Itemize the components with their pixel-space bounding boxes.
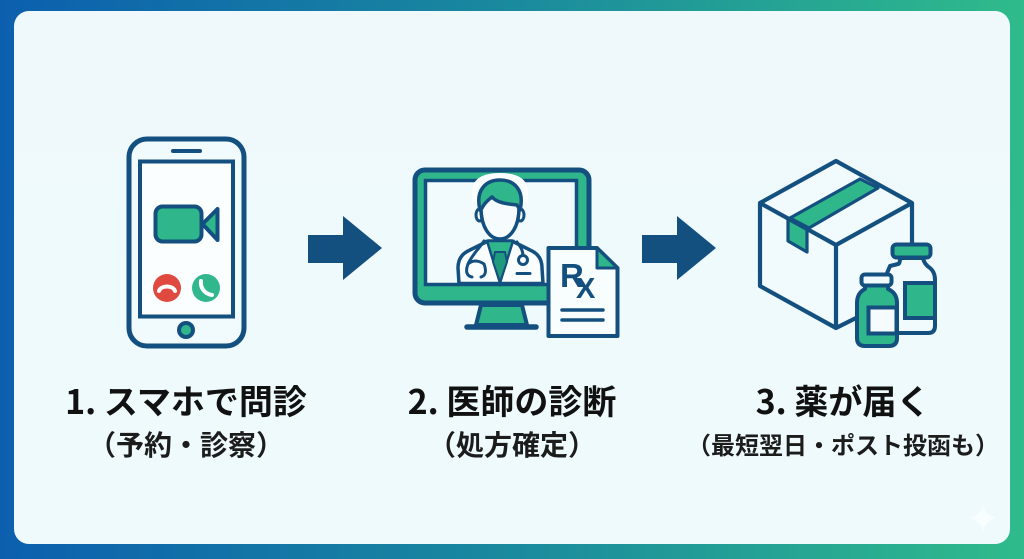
prescription document: R (560, 257, 584, 294)
prescription document (548, 248, 618, 336)
prescription document: X (576, 273, 596, 305)
heading: step 1: 1. スマホで問診 (65, 375, 307, 424)
text: step 2 note: （処方確定） (428, 424, 596, 464)
arrow: step 1 to 2 (308, 216, 382, 280)
text: step 1 note: （予約・診察） (88, 424, 284, 464)
heading: step 3: 3. 薬が届く (756, 375, 930, 424)
icon: sparkle watermark (969, 505, 997, 532)
heading: step 2: 2. 医師の診断 (408, 375, 616, 424)
monitor (415, 170, 589, 327)
parcel box (760, 161, 912, 328)
icon: smartphone video call (129, 139, 244, 346)
doctor (458, 173, 543, 284)
arrow: step 2 to 3 (642, 216, 716, 280)
icon: doctor on monitor with prescription (415, 170, 618, 336)
large bottle (880, 244, 935, 333)
text: step 3 note: （最短翌日・ポスト投函も） (687, 426, 999, 461)
icon: parcel and medicine bottles (760, 161, 935, 346)
small bottle (857, 274, 897, 346)
